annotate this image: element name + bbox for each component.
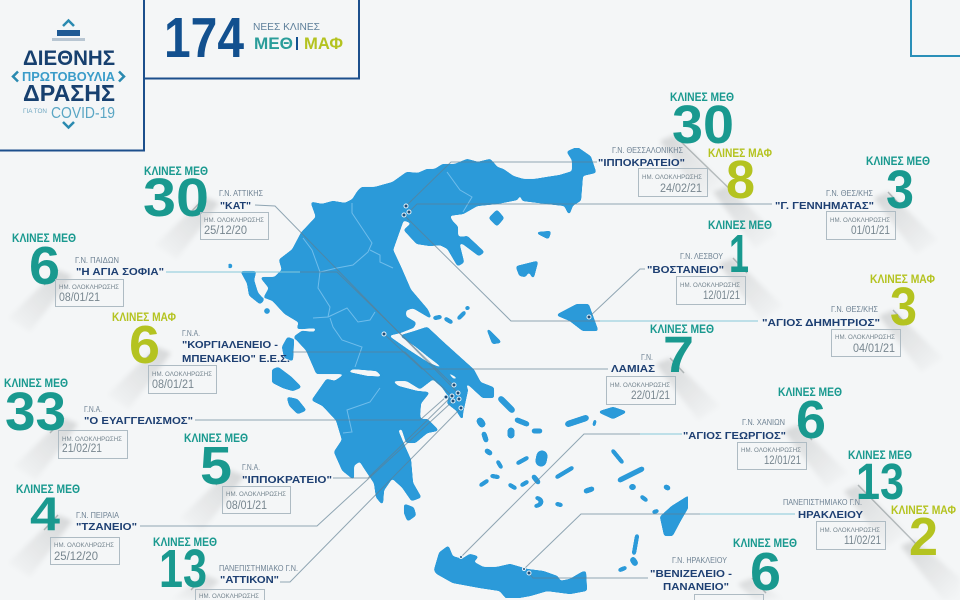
hospital: ΛΑΜΙΑΣ: 22/01/21 (631, 390, 670, 402)
hospital: Ο ΕΥΑΓΓΕΛΙΣΜΟΣ (4, 378, 193, 480)
hospital: ΚΟΡΓΙΑΛΕΝΕΙΟ - ΜΠΕΝΑΚΕΙΟ: 6 (129, 315, 160, 375)
hospital: Η ΑΓΙΑ ΣΟΦΙΑ (8, 233, 164, 332)
hospital: ΚΟΡΓΙΑΛΕΝΕΙΟ - ΜΠΕΝΑΚΕΙΟ: ΗΜ. ΟΛΟΚΛΗΡΩΣΗΣ (152, 372, 212, 378)
hospital: ΗΡΑΚΛΕΙΟΥ: 2 (909, 507, 938, 567)
hospital: ΤΖΑΝΕΙΟ: ΚΛΙΝΕΣ ΜΕΘ (16, 484, 80, 496)
hospital: ΗΡΑΚΛΕΙΟΥ: ΗΜ. ΟΛΟΚΛΗΡΩΣΗΣ (820, 528, 880, 534)
hospital: Η ΑΓΙΑ ΣΟΦΙΑ: "Η ΑΓΙΑ ΣΟΦΙΑ" (76, 266, 164, 278)
hospital: ΙΠΠΟΚΡΑΤΕΙΟ Γ.Ν.Α.: ΚΛΙΝΕΣ ΜΕΘ (184, 433, 248, 445)
hospital: ΒΕΝΙΖΕΛΕΙΟ - ΠΑΝΑΝΕΙΟ (650, 538, 797, 600)
hospital: ΑΓΙΟΣ ΔΗΜΗΤΡΙΟΣ: 3 (890, 277, 917, 337)
hospital: Γ. ΓΕΝΝΗΜΑΤΑΣ: 3 (886, 160, 914, 220)
hospital: Γ. ΓΕΝΝΗΜΑΤΑΣ (775, 156, 938, 254)
land masses (228, 148, 688, 598)
hospital: ΛΑΜΙΑΣ: ΚΛΙΝΕΣ ΜΕΘ (650, 324, 714, 336)
total panel (144, 0, 359, 78)
hospital: Η ΑΓΙΑ ΣΟΦΙΑ: ΗΜ. ΟΛΟΚΛΗΡΩΣΗΣ (59, 285, 119, 291)
hospital: ΙΠΠΟΚΡΑΤΕΙΟ Θεσσαλονίκης: 8 (726, 150, 755, 210)
hospital: ΑΓΙΟΣ ΓΕΩΡΓΙΟΣ: 12/01/21 (764, 455, 801, 467)
hospital: ΙΠΠΟΚΡΑΤΕΙΟ Γ.Ν.Α.: Γ.Ν.Α. (242, 463, 260, 472)
hospital: ΤΖΑΝΕΙΟ: "ΤΖΑΝΕΙΟ" (76, 521, 137, 533)
hospital: ΛΑΜΙΑΣ: 7 (663, 326, 694, 383)
hospital: ΤΖΑΝΕΙΟ (8, 484, 137, 577)
hospital: ΗΡΑΚΛΕΙΟΥ (783, 450, 960, 600)
icon: chevron left (13, 72, 18, 82)
hospital: Γ. ΓΕΝΝΗΜΑΤΑΣ: "Γ. ΓΕΝΝΗΜΑΤΑΣ" (775, 200, 874, 212)
total number: 174 (164, 6, 244, 70)
hospital: ΚΑΤ: 25/12/20 (204, 225, 247, 237)
hospital: ΚΑΤ: ΚΛΙΝΕΣ ΜΕΘ (144, 166, 208, 178)
hospital: ΑΓΙΟΣ ΓΕΩΡΓΙΟΣ: ΚΛΙΝΕΣ ΜΕΘ (778, 387, 842, 399)
hospital: ΒΕΝΙΖΕΛΕΙΟ - ΠΑΝΑΝΕΙΟ: ΚΛΙΝΕΣ ΜΕΘ (733, 538, 797, 550)
legend: ΜΕΘ: ΜΕΘ (254, 35, 293, 53)
mainland (262, 148, 595, 418)
hospital: ΙΠΠΟΚΡΑΤΕΙΟ Γ.Ν.Α.: "ΙΠΠΟΚΡΑΤΕΙΟ" (242, 474, 332, 486)
hospital: ΚΟΡΓΙΑΛΕΝΕΙΟ - ΜΠΕΝΑΚΕΙΟ (107, 312, 290, 409)
Euboea (402, 328, 493, 397)
hospital: Ο ΕΥΑΓΓΕΛΙΣΜΟΣ: Γ.Ν.Α. (84, 405, 102, 414)
hospital: ΛΑΜΙΑΣ: ΛΑΜΙΑΣ (611, 363, 655, 375)
hospital: ΛΑΜΙΑΣ: ΗΜ. ΟΛΟΚΛΗΡΩΣΗΣ (610, 383, 670, 389)
icon: chevron up (63, 20, 74, 26)
hospital: ΒΟΣΤΑΝΕΙΟ: ΗΜ. ΟΛΟΚΛΗΡΩΣΗΣ (680, 283, 740, 289)
Crete (435, 547, 586, 598)
hospital: ΤΖΑΝΕΙΟ: Γ.Ν. ΠΕΙΡΑΙΑ (76, 511, 120, 520)
legend: ΜΑΦ: ΜΑΦ (304, 35, 343, 53)
icon: chevron right (119, 72, 124, 82)
logo word: ΔΡΑΣΗΣ: ΔΡΑΣΗΣ (23, 80, 115, 106)
hospital: ΑΓΙΟΣ ΓΕΩΡΓΙΟΣ: Γ.Ν. ΧΑΝΙΩΝ (742, 418, 785, 427)
Peloponnese (313, 373, 437, 503)
Kythira (405, 505, 415, 520)
logo badge (57, 30, 80, 36)
logo word: ΠΡΩΤΟΒΟΥΛΙΑ: ΠΡΩΤΟΒΟΥΛΙΑ (22, 70, 115, 84)
Ionian islands (242, 272, 263, 303)
legend divider (296, 37, 298, 50)
hospital: Ο ΕΥΑΓΓΕΛΙΣΜΟΣ: ΚΛΙΝΕΣ ΜΕΘ (4, 378, 68, 390)
leader lines (140, 162, 795, 582)
hospital: ΑΤΤΙΚΟΝ (153, 537, 298, 600)
hospital: ΙΠΠΟΚΡΑΤΕΙΟ Θεσσαλονίκης (598, 92, 777, 248)
hospital: ΤΖΑΝΕΙΟ: 25/12/20 (54, 551, 98, 563)
hospital: ΙΠΠΟΚΡΑΤΕΙΟ Θεσσαλονίκης: Γ.Ν. ΘΕΣΣΑΛΟΝΙΚΗΣ (612, 146, 683, 155)
hospital: Γ. ΓΕΝΝΗΜΑΤΑΣ: Γ.Ν. ΘΕΣ/ΚΗΣ (826, 189, 873, 198)
hospital: ΙΠΠΟΚΡΑΤΕΙΟ Γ.Ν.Α.: 08/01/21 (226, 500, 267, 512)
logo word: COVID-19: COVID-19 (51, 105, 115, 122)
hospital: ΙΠΠΟΚΡΑΤΕΙΟ Θεσσαλονίκης: 24/02/21 (660, 183, 702, 195)
hospital: ΗΡΑΚΛΕΙΟΥ: 13 (856, 453, 904, 510)
logo panel (0, 0, 144, 150)
hospital: ΒΟΣΤΑΝΕΙΟ: 12/01/21 (703, 290, 740, 302)
hospital: ΒΟΣΤΑΝΕΙΟ: "ΒΟΣΤΑΝΕΙΟ" (647, 264, 724, 276)
hospital: ΚΑΤ (143, 166, 268, 259)
hospital: Η ΑΓΙΑ ΣΟΦΙΑ: 08/01/21 (59, 292, 100, 304)
hospital: ΒΟΣΤΑΝΕΙΟ (647, 220, 783, 320)
hospital: ΤΖΑΝΕΙΟ: ΗΜ. ΟΛΟΚΛΗΡΩΣΗΣ (54, 543, 114, 549)
hospital: ΙΠΠΟΚΡΑΤΕΙΟ Θεσσαλονίκης: ΗΜ. ΟΛΟΚΛΗΡΩΣΗΣ (642, 175, 702, 181)
hospital: Ο ΕΥΑΓΓΕΛΙΣΜΟΣ: 21/02/21 (62, 443, 102, 455)
hospital: Η ΑΓΙΑ ΣΟΦΙΑ: ΚΛΙΝΕΣ ΜΕΘ (12, 233, 76, 245)
hospital: ΑΓΙΟΣ ΔΗΜΗΤΡΙΟΣ: Γ.Ν. ΘΕΣ/ΚΗΣ (831, 305, 878, 314)
hospital: ΚΟΡΓΙΑΛΕΝΕΙΟ - ΜΠΕΝΑΚΕΙΟ: ΚΛΙΝΕΣ ΜΑΦ (112, 312, 176, 324)
North Aegean islands (490, 211, 503, 225)
hospital: ΑΓΙΟΣ ΔΗΜΗΤΡΙΟΣ: "ΑΓΙΟΣ ΔΗΜΗΤΡΙΟΣ" (762, 317, 880, 329)
hospital: Γ. ΓΕΝΝΗΜΑΤΑΣ: ΗΜ. ΟΛΟΚΛΗΡΩΣΗΣ (830, 218, 890, 224)
icon: chevron down (63, 122, 74, 128)
logo small print (52, 38, 85, 41)
hospital: ΛΑΜΙΑΣ: Γ.Ν. (641, 353, 653, 362)
hospital: ΑΓΙΟΣ ΔΗΜΗΤΡΙΟΣ: ΚΛΙΝΕΣ ΜΑΦ (870, 274, 935, 286)
hospital: Γ. ΓΕΝΝΗΜΑΤΑΣ: 01/01/21 (851, 225, 890, 237)
hospital: ΗΡΑΚΛΕΙΟΥ: 11/02/21 (844, 535, 881, 547)
hospital: ΒΕΝΙΖΕΛΕΙΟ - ΠΑΝΑΝΕΙΟ: Γ.Ν. ΗΡΑΚΛΕΙΟΥ (672, 556, 728, 565)
hospital: ΙΠΠΟΚΡΑΤΕΙΟ Γ.Ν.Α.: 5 (200, 436, 232, 496)
hospital: ΑΓΙΟΣ ΓΕΩΡΓΙΟΣ (683, 387, 848, 487)
hospital: Ο ΕΥΑΓΓΕΛΙΣΜΟΣ: 33 (5, 382, 66, 442)
logo word: ΓΙΑ ΤΟΝ: ΓΙΑ ΤΟΝ (23, 109, 47, 115)
hospital: ΙΠΠΟΚΡΑΤΕΙΟ Θεσσαλονίκης: ΚΛΙΝΕΣ ΜΕΘ (670, 92, 734, 104)
total caption: ΝΕΕΣ ΚΛΙΝΕΣ (253, 22, 320, 33)
hospital: ΑΤΤΙΚΟΝ: ΚΛΙΝΕΣ ΜΕΘ (153, 537, 217, 549)
hospital: ΑΓΙΟΣ ΔΗΜΗΤΡΙΟΣ: 04/01/21 (853, 343, 895, 355)
hospital: ΚΑΤ: ΗΜ. ΟΛΟΚΛΗΡΩΣΗΣ (204, 218, 264, 224)
hospital: ΑΤΤΙΚΟΝ: ΠΑΝΕΠΙΣΤΗΜΙΑΚΟ Γ.Ν. (219, 564, 298, 573)
islands drawn as thick strokes (435, 308, 668, 570)
top right corner frame (911, 0, 960, 56)
hospital: ΙΠΠΟΚΡΑΤΕΙΟ Γ.Ν.Α.: ΗΜ. ΟΛΟΚΛΗΡΩΣΗΣ (226, 492, 286, 498)
hospital: ΑΓΙΟΣ ΓΕΩΡΓΙΟΣ: "ΑΓΙΟΣ ΓΕΩΡΓΙΟΣ" (683, 430, 786, 442)
hospital: ΚΑΤ: "ΚΑΤ" (220, 200, 251, 212)
hospital: ΚΑΤ: 30 (143, 168, 209, 228)
hospital: ΗΡΑΚΛΕΙΟΥ: ΚΛΙΝΕΣ ΜΕΘ (848, 450, 912, 462)
hospital: ΑΤΤΙΚΟΝ: "ΑΤΤΙΚΟΝ" (220, 574, 279, 586)
hospital: ΚΟΡΓΙΑΛΕΝΕΙΟ - ΜΠΕΝΑΚΕΙΟ: ΜΠΕΝΑΚΕΙΟ" Ε.Ε.Σ. (182, 353, 290, 365)
hospital: Ο ΕΥΑΓΓΕΛΙΣΜΟΣ: ΗΜ. ΟΛΟΚΛΗΡΩΣΗΣ (62, 437, 122, 443)
hospital: ΙΠΠΟΚΡΑΤΕΙΟ Θεσσαλονίκης: 30 (672, 95, 734, 155)
hospital: ΗΡΑΚΛΕΙΟΥ: ΗΡΑΚΛΕΙΟΥ (798, 509, 863, 521)
hospital: Η ΑΓΙΑ ΣΟΦΙΑ: Γ.Ν. ΠΑΙΔΩΝ (75, 256, 119, 265)
hospital: ΙΠΠΟΚΡΑΤΕΙΟ Θεσσαλονίκης: ΚΛΙΝΕΣ ΜΑΦ (708, 148, 772, 160)
hospital: ΒΟΣΤΑΝΕΙΟ: Γ.Ν. ΛΕΣΒΟΥ (680, 252, 724, 261)
hospital: ΚΟΡΓΙΑΛΕΝΕΙΟ - ΜΠΕΝΑΚΕΙΟ: Γ.Ν.Α. (182, 329, 200, 338)
logo word: ΔΙΕΘΝΗΣ: ΔΙΕΘΝΗΣ (23, 47, 115, 70)
Rhodes (661, 497, 688, 535)
hospital: Γ. ΓΕΝΝΗΜΑΤΑΣ: ΚΛΙΝΕΣ ΜΕΘ (866, 156, 930, 168)
hospital: ΗΡΑΚΛΕΙΟΥ: ΠΑΝΕΠΙΣΤΗΜΙΑΚΟ Γ.Ν. (783, 498, 862, 507)
hospital: ΒΕΝΙΖΕΛΕΙΟ - ΠΑΝΑΝΕΙΟ: "ΒΕΝΙΖΕΛΕΙΟ - (650, 568, 733, 580)
hospital: ΚΟΡΓΙΑΛΕΝΕΙΟ - ΜΠΕΝΑΚΕΙΟ: 08/01/21 (152, 379, 194, 391)
regional borders (303, 172, 472, 433)
hospital: ΑΓΙΟΣ ΔΗΜΗΤΡΙΟΣ (762, 274, 943, 372)
hospital: ΤΖΑΝΕΙΟ: 4 (30, 487, 60, 540)
hospital: ΑΓΙΟΣ ΓΕΩΡΓΙΟΣ: 6 (796, 390, 826, 450)
hospital: ΑΤΤΙΚΟΝ: 13 (159, 539, 207, 599)
hospital: ΑΤΤΙΚΟΝ: ΗΜ. ΟΛΟΚΛΗΡΩΣΗΣ (199, 594, 259, 600)
hospital: ΑΓΙΟΣ ΓΕΩΡΓΙΟΣ: ΗΜ. ΟΛΟΚΛΗΡΩΣΗΣ (741, 448, 801, 454)
hospital: ΙΠΠΟΚΡΑΤΕΙΟ Θεσσαλονίκης: "ΙΠΠΟΚΡΑΤΕΙΟ" (598, 157, 685, 169)
hospital location dots (382, 204, 591, 575)
hospital: ΛΑΜΙΑΣ (606, 324, 720, 420)
hospital: ΚΟΡΓΙΑΛΕΝΕΙΟ - ΜΠΕΝΑΚΕΙΟ: "ΚΟΡΓΙΑΛΕΝΕΙΟ - (182, 339, 279, 351)
hospital: ΒΟΣΤΑΝΕΙΟ: 1 (729, 224, 749, 284)
hospital: Ο ΕΥΑΓΓΕΛΙΣΜΟΣ: "Ο ΕΥΑΓΓΕΛΙΣΜΟΣ" (84, 415, 193, 427)
map of Greece (228, 148, 688, 598)
hospital: ΒΟΣΤΑΝΕΙΟ: ΚΛΙΝΕΣ ΜΕΘ (708, 220, 772, 232)
hospital: ΒΕΝΙΖΕΛΕΙΟ - ΠΑΝΑΝΕΙΟ: ΠΑΝΑΝΕΙΟ" (663, 581, 729, 593)
hospital: ΙΠΠΟΚΡΑΤΕΙΟ Γ.Ν.Α. (180, 433, 332, 532)
hospital: ΑΓΙΟΣ ΔΗΜΗΤΡΙΟΣ: ΗΜ. ΟΛΟΚΛΗΡΩΣΗΣ (835, 335, 895, 341)
hospital: ΚΑΤ: Γ.Ν. ΑΤΤΙΚΗΣ (219, 189, 263, 198)
hospital: Η ΑΓΙΑ ΣΟΦΙΑ: 6 (29, 236, 60, 296)
